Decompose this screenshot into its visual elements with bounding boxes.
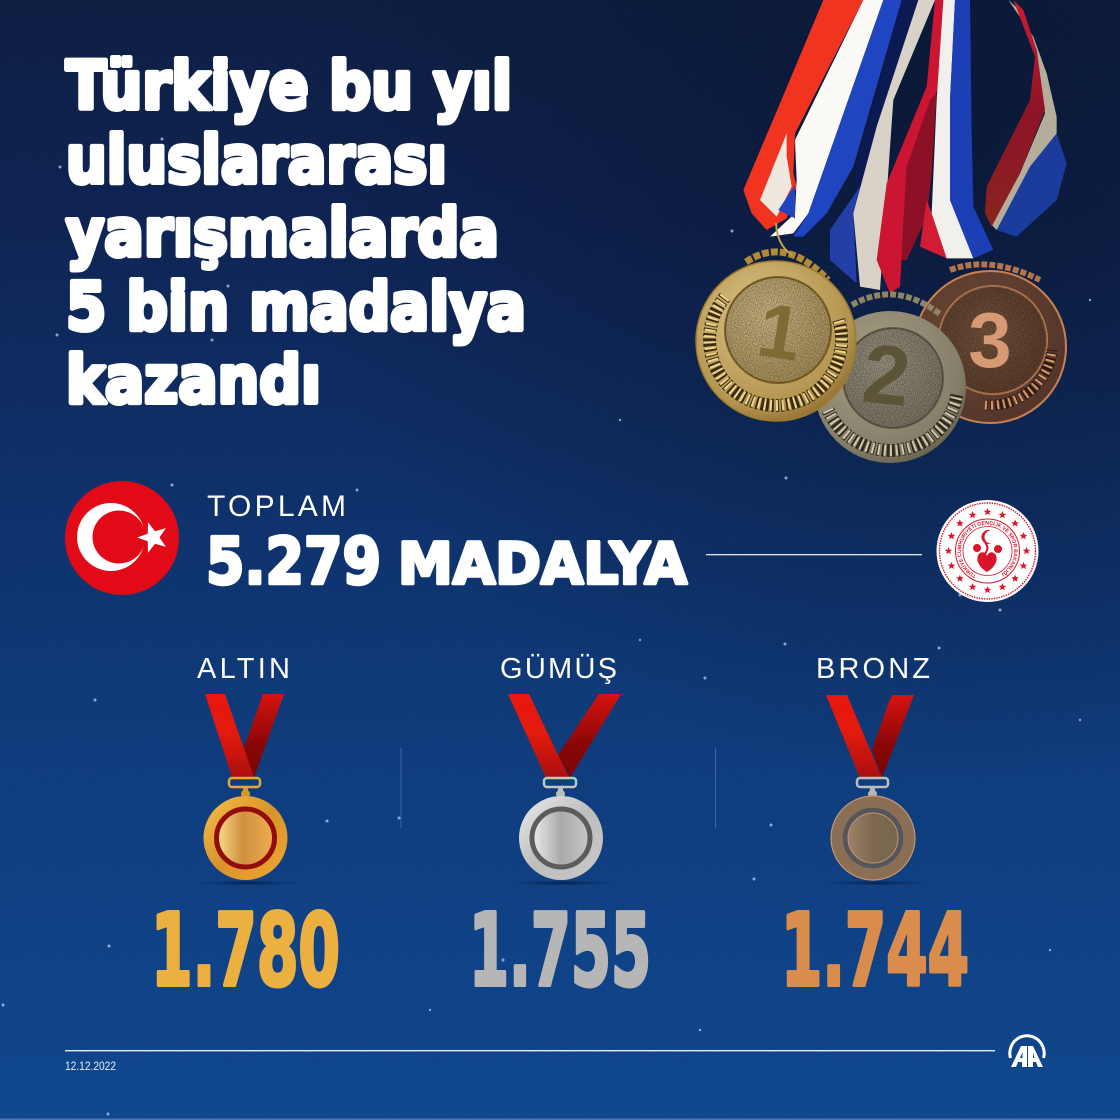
logo: Anadolu Agency — [1010, 1036, 1044, 1067]
total label: TOPLAM — [207, 490, 346, 523]
medal 2: silver — [814, 294, 966, 463]
date: 12.12.2022 — [65, 1061, 116, 1073]
category label: bronze: BRONZ — [816, 653, 930, 685]
title: kazandı — [66, 342, 321, 418]
icon: silver medal — [508, 694, 621, 885]
title — [66, 48, 526, 418]
title: 5 bin madalya — [66, 268, 526, 346]
value: silver count: 1.755 — [469, 892, 651, 1009]
logo: ministry seal: TÜRKİYE CUMHURİYETİ GENÇLİK VE SPOR BAKANLIĞI — [957, 520, 1018, 578]
icon: gold medal — [193, 694, 303, 885]
medal 3: bronze: 3 — [968, 296, 1012, 384]
category label: silver: GÜMÜŞ — [500, 653, 617, 685]
icon: Turkish flag — [65, 481, 179, 595]
ribbon: silver medal strap — [830, 0, 947, 293]
total value: 5.279 — [206, 526, 381, 600]
total value — [206, 526, 687, 600]
medal 1: gold — [696, 223, 856, 421]
ribbon: gold medal strap — [743, 0, 902, 237]
title: Türkiye bu yıl — [66, 48, 512, 124]
logo: ministry seal — [936, 500, 1038, 602]
value: gold count: 1.780 — [151, 892, 340, 1009]
photo: three medals with ribbons — [696, 0, 1067, 463]
medal 3: bronze — [913, 264, 1067, 424]
medal 2: silver: 2 — [858, 326, 915, 424]
icon: bronze medal — [821, 695, 931, 885]
ribbon: centre strap — [920, 0, 993, 258]
category label: gold: ALTIN — [197, 653, 290, 685]
title: yarışmalarda — [66, 194, 499, 272]
ribbon: bronze medal strap — [985, 0, 1067, 237]
title: uluslararası — [66, 122, 447, 198]
value: bronze count: 1.744 — [781, 892, 969, 1009]
total value: MADALYA — [398, 532, 687, 598]
medal 1: gold: 1 — [752, 287, 807, 378]
